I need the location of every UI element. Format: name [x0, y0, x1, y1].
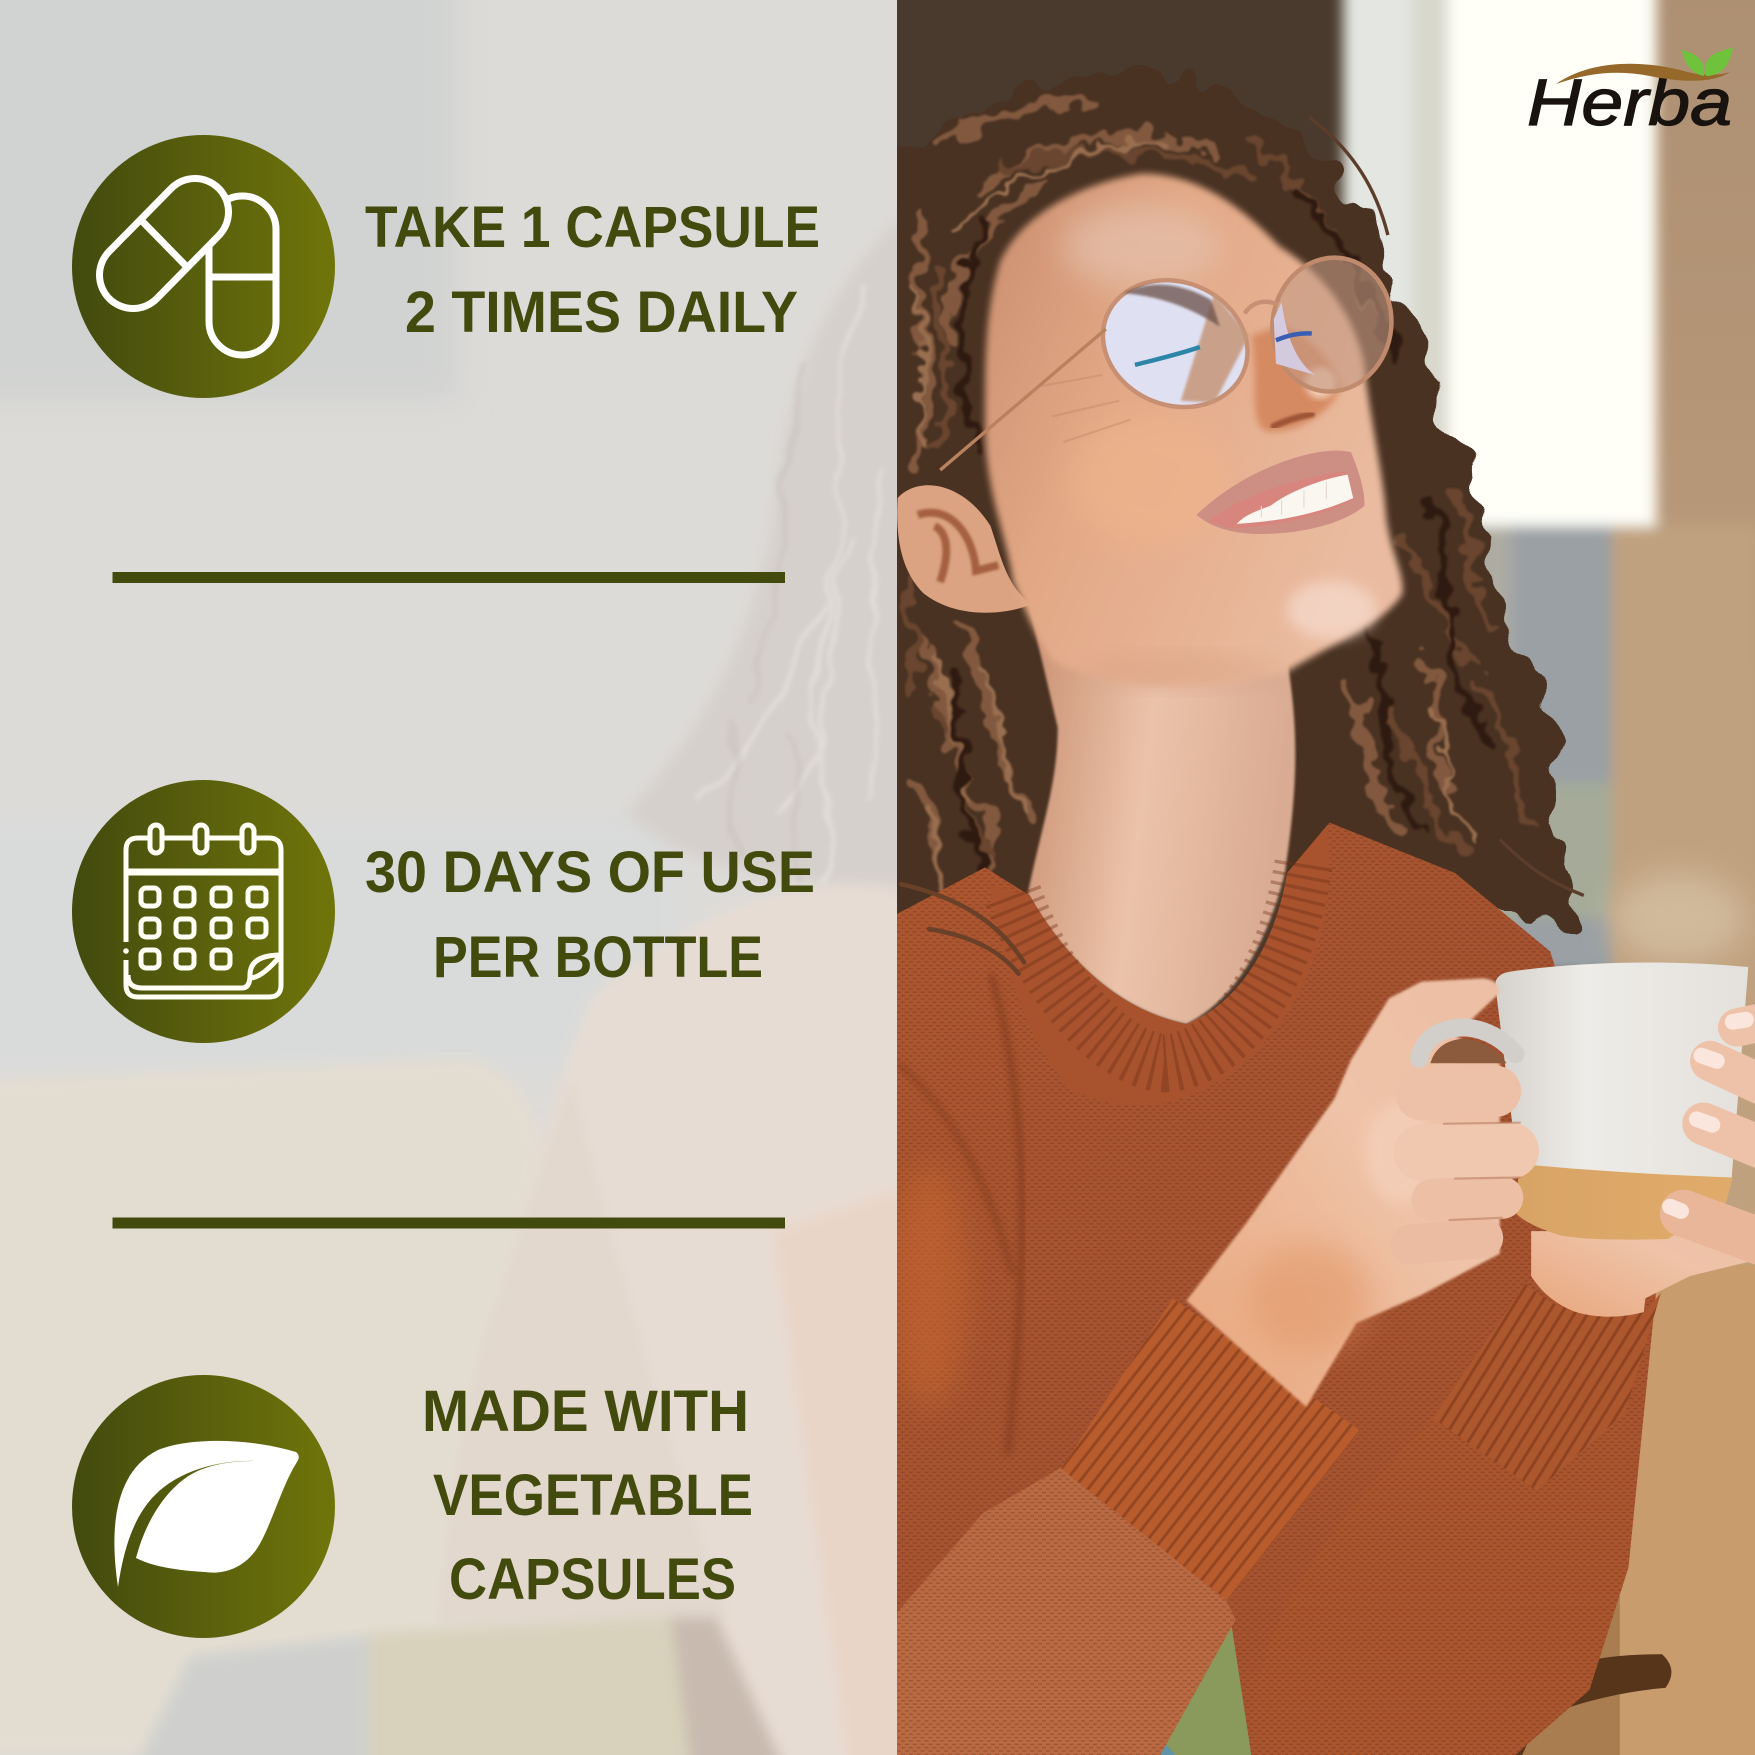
cuff ribbing	[1061, 1284, 1661, 1601]
logo: Herba	[1527, 48, 1733, 139]
ear	[897, 485, 1032, 613]
right sleeve	[1251, 1413, 1629, 1755]
logo leaves	[1682, 48, 1733, 76]
logo wordmark: Herba	[1527, 65, 1732, 139]
icon: capsules in circle	[72, 135, 335, 398]
panel: photo of smiling woman with mug	[867, 0, 1755, 1755]
hair	[897, 65, 1584, 934]
chair handle	[1505, 1654, 1671, 1755]
left sleeve	[890, 1466, 1236, 1755]
faded cushion	[142, 1636, 371, 1755]
neck	[1027, 599, 1295, 1024]
icon: calendar in circle	[72, 780, 335, 1043]
glasses	[940, 248, 1402, 470]
sofa	[372, 1067, 479, 1071]
text: dosage	[365, 195, 820, 345]
far hand fingers	[1670, 1020, 1755, 1242]
text: vegetable capsules	[422, 1379, 753, 1612]
mug	[1495, 962, 1748, 1240]
near hand palm and thumb	[1186, 978, 1500, 1407]
text: duration: 30 DAYS OF USE	[365, 840, 815, 905]
right cuff	[1433, 1284, 1661, 1491]
panel: photo background faded	[0, 0, 907, 1755]
hair curl over collar	[901, 884, 1024, 974]
text: duration	[365, 840, 815, 990]
sweater collar	[989, 825, 1329, 1106]
sweater	[890, 823, 1657, 1755]
mug handle	[1419, 1027, 1515, 1063]
text: vegetable capsules: CAPSULES	[449, 1547, 736, 1612]
text: vegetable capsules: VEGETABLE	[433, 1463, 753, 1528]
faded hair	[627, 213, 907, 895]
faded sweater	[567, 886, 897, 1755]
text: dosage: TAKE 1 CAPSULE	[365, 195, 820, 260]
left cuff	[1061, 1298, 1360, 1601]
mouth	[1196, 451, 1365, 534]
face	[940, 173, 1403, 689]
photo background room	[895, 0, 1755, 1755]
green scarf layer	[1166, 1626, 1251, 1755]
logo swoosh	[1556, 64, 1730, 84]
nose	[1251, 325, 1341, 432]
far hand	[1531, 1231, 1748, 1317]
icon: leaf in circle	[72, 1375, 335, 1638]
text: duration: PER BOTTLE	[433, 925, 763, 990]
text: dosage: 2 TIMES DAILY	[405, 280, 798, 345]
near hand fingers	[1410, 1091, 1520, 1245]
text: vegetable capsules: MADE WITH	[422, 1379, 749, 1444]
